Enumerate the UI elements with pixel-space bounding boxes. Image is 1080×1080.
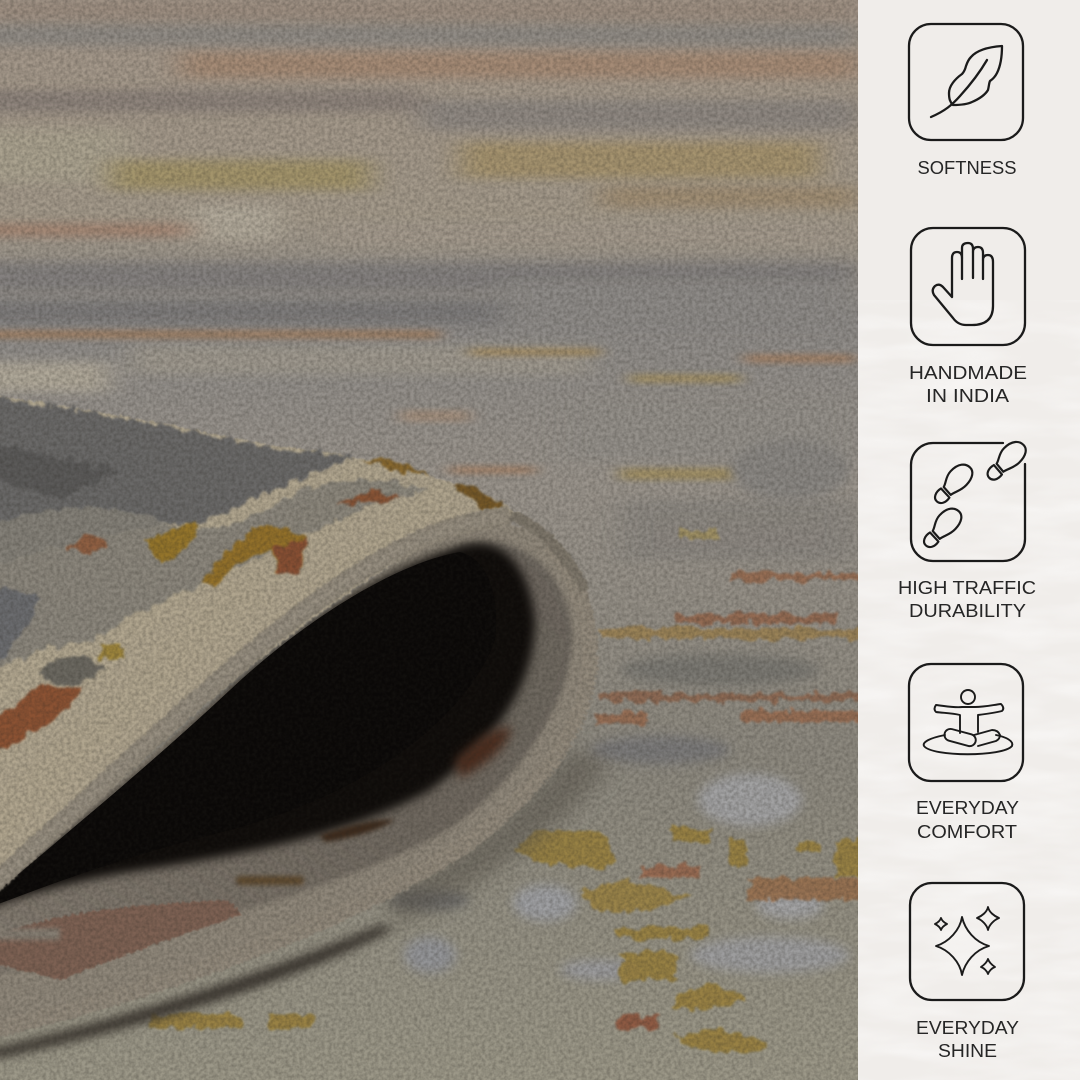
label: everyday comfort: EVERYDAY: [916, 797, 1019, 818]
rolled rug corner: [0, 392, 597, 1045]
label: handmade in India: HANDMADE: [909, 362, 1027, 383]
near orange and gold bands: [596, 530, 878, 724]
shadow cast by the roll: [0, 925, 395, 1064]
feature: everyday comfort: COMFORT: [917, 821, 1017, 842]
pink patch on the underside: [0, 900, 242, 980]
label: softness: SOFTNESS: [918, 157, 1016, 178]
mid stripes in orange and gold: [0, 330, 855, 480]
underside flap with fringed edge: [0, 525, 597, 1045]
icon: hand: [911, 228, 1025, 345]
icon: seated meditation: [909, 664, 1023, 781]
braided rim: [0, 516, 510, 905]
feature: handmade in India: IN INDIA: [926, 385, 1010, 406]
grey weave on top face: [0, 395, 354, 527]
feature: everyday shine: SHINE: [938, 1040, 997, 1061]
gold tufts on the near rug: [150, 828, 877, 1052]
feature: handmade in India: [909, 228, 1027, 406]
fuzzy outer edge: [518, 746, 571, 810]
icon: feather: [909, 24, 1023, 140]
feature: everyday comfort: [909, 664, 1023, 842]
mottled dark and light patches on the near floor: [390, 440, 850, 980]
woven texture overlay: [0, 0, 858, 1080]
panel: features sidebar: [858, 0, 1080, 1080]
feature: everyday shine: [910, 883, 1024, 1061]
far rug stripes: [0, 0, 860, 560]
feature: high traffic durability: DURABILITY: [909, 600, 1026, 621]
label: high traffic durability: HIGH TRAFFIC: [898, 577, 1036, 598]
feature: softness: [909, 24, 1023, 178]
rust and gold motifs on top face: [0, 458, 505, 770]
top face of the rug: [0, 392, 520, 905]
icon: footsteps: [911, 437, 1030, 561]
label: everyday shine: EVERYDAY: [916, 1017, 1019, 1038]
feature: high traffic durability: [898, 437, 1036, 621]
icon: sparkles: [910, 883, 1024, 1000]
dark hollow of the roll: [0, 543, 535, 915]
